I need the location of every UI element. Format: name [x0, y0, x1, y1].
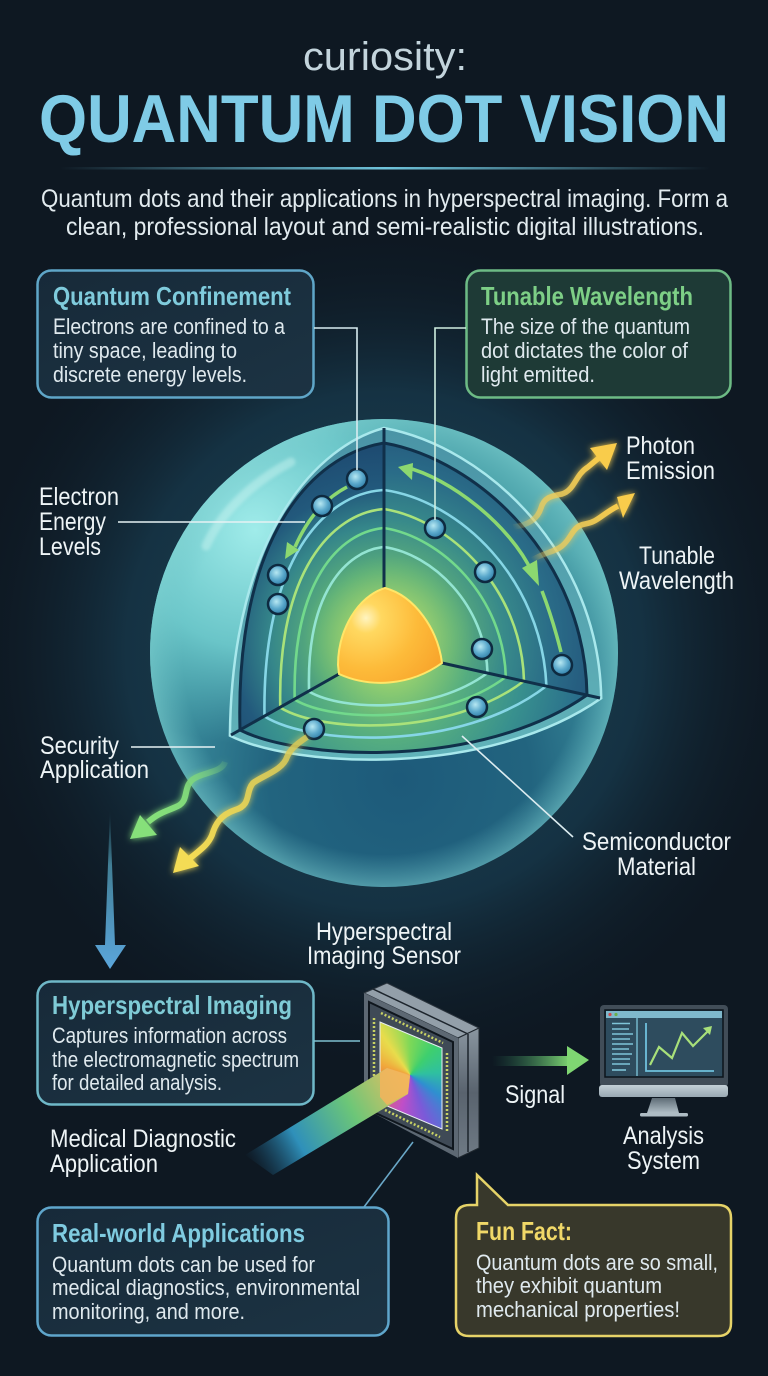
callout: Tunable Wavelength — [466, 270, 730, 398]
label: Analysis System: System — [627, 1147, 700, 1175]
leader line: Electron Energy Levels — [118, 521, 305, 523]
monitor base and stand — [599, 1085, 728, 1116]
label: Security Application: Security — [40, 732, 119, 760]
callout: Tunable Wavelength: light emitted. — [481, 362, 595, 387]
callout: Quantum Confinement — [38, 270, 314, 398]
callout: Real-world Applications: Real-world Applications — [52, 1218, 305, 1248]
dark wedge edges — [231, 428, 600, 752]
label: Medical Diagnostic Application: Application — [50, 1150, 158, 1178]
callout: Tunable Wavelength: Tunable Wavelength — [481, 281, 693, 311]
callout: Hyperspectral Imaging: Hyperspectral Imaging — [52, 990, 292, 1020]
energy level rings — [264, 490, 546, 738]
label: Electron Energy Levels: Electron — [39, 483, 119, 511]
callout: Tunable Wavelength: The size of the quantum — [481, 314, 690, 339]
label: Analysis System: Analysis — [623, 1122, 704, 1150]
label: Signal: Signal — [505, 1081, 565, 1109]
sensor rainbow detector — [380, 1022, 442, 1128]
icon: analysis monitor — [599, 1005, 728, 1116]
label: Semiconductor Material: Semiconductor — [582, 828, 731, 856]
title block: curiosity: — [303, 35, 467, 79]
callout: Real-world Applications: Quantum dots can be used for — [52, 1252, 315, 1277]
callout: Quantum Confinement: tiny space, leading to — [53, 338, 237, 363]
sensor front plate — [364, 993, 458, 1158]
callout: Tunable Wavelength: dot dictates the color of — [481, 338, 689, 363]
sensor body right side — [458, 1028, 479, 1158]
label: Hyperspectral Imaging Sensor — [307, 918, 461, 970]
callout: Quantum Confinement: Electrons are confined to a — [53, 314, 286, 339]
sensor contact pads — [374, 1013, 447, 1137]
callout: Hyperspectral Imaging: Captures information across — [52, 1023, 287, 1048]
leader line: Quantum Confinement — [314, 328, 357, 470]
subtitle — [41, 185, 728, 241]
callout: Quantum Confinement: Quantum Confinement — [53, 281, 291, 311]
photon arrows lower left — [130, 737, 307, 873]
label: Hyperspectral Imaging Sensor: Hyperspectral — [316, 918, 452, 946]
leader line: Semiconductor Material — [462, 736, 573, 837]
label: Medical Diagnostic Application — [50, 1125, 236, 1178]
monitor bezel — [600, 1005, 728, 1087]
callout: Real-world Applications: monitoring, and more. — [52, 1299, 245, 1324]
light beam entering sensor — [245, 1068, 410, 1175]
label: Medical Diagnostic Application: Medical Diagnostic — [50, 1125, 236, 1153]
label: Security Application — [40, 732, 149, 784]
monitor chart — [646, 1023, 714, 1071]
leader line: Real-world Applications to sensor — [364, 1142, 413, 1207]
subtitle: clean, professional layout and semi-realistic digital illustrations. — [66, 213, 704, 241]
label: Electron Energy Levels: Energy — [39, 508, 106, 536]
label: Security Application: Application — [40, 756, 149, 784]
green energy arrows — [285, 463, 561, 652]
label: Photon Emission: Photon — [626, 432, 695, 460]
callout: Fun Fact — [456, 1175, 731, 1336]
outer glass sphere — [150, 419, 618, 887]
callout: Real-world Applications: medical diagnostics, environmental — [52, 1275, 360, 1300]
callout: Real-world Applications — [38, 1208, 388, 1336]
leader line: Tunable Wavelength — [435, 328, 466, 520]
callout: Hyperspectral Imaging — [38, 982, 314, 1104]
electrons — [268, 469, 572, 739]
arrow: down to hyperspectral imaging — [95, 810, 126, 969]
callout: Fun Fact: Quantum dots are so small, — [476, 1250, 718, 1275]
quantum dot core — [338, 588, 442, 683]
core glow — [305, 555, 475, 725]
arrow: signal — [492, 1046, 589, 1075]
label: Analysis System — [623, 1122, 704, 1175]
label: Photon Emission — [626, 432, 715, 485]
title block — [39, 35, 729, 157]
label: Semiconductor Material — [582, 828, 731, 881]
photon arrows upper right — [513, 443, 635, 560]
label: Semiconductor Material: Material — [617, 853, 696, 881]
label: Hyperspectral Imaging Sensor: Imaging Sensor — [307, 942, 461, 970]
sensor body top side — [364, 983, 479, 1038]
monitor side list — [612, 1018, 637, 1076]
label: Tunable Wavelength: Tunable — [639, 542, 715, 570]
icon: hyperspectral sensor — [364, 983, 479, 1158]
floor of cut-away — [240, 650, 587, 752]
label: Electron Energy Levels — [39, 483, 119, 561]
callout: Hyperspectral Imaging: the electromagnetic spectrum — [52, 1047, 299, 1072]
cut-away shell rim — [230, 428, 601, 760]
right wall of cut-away — [384, 443, 587, 695]
quantum dot sphere illustration — [126, 419, 638, 887]
label: Tunable Wavelength — [619, 542, 734, 595]
monitor screen — [605, 1010, 723, 1077]
callout: Fun Fact: mechanical properties! — [476, 1297, 680, 1322]
label: Photon Emission: Emission — [626, 457, 715, 485]
callout: Fun Fact: Fun Fact: — [476, 1216, 572, 1246]
callout: Hyperspectral Imaging: for detailed analysis. — [52, 1070, 222, 1095]
divider under title — [60, 167, 710, 170]
label: Electron Energy Levels: Levels — [39, 533, 101, 561]
left wall of cut-away — [240, 443, 384, 730]
leader line: Hyperspectral Imaging to sensor — [314, 1040, 360, 1042]
callout: Quantum Confinement: discrete energy levels. — [53, 362, 247, 387]
callout: Fun Fact: they exhibit quantum — [476, 1273, 662, 1298]
leader line: Security Application — [131, 746, 215, 748]
label: Tunable Wavelength: Wavelength — [619, 567, 734, 595]
